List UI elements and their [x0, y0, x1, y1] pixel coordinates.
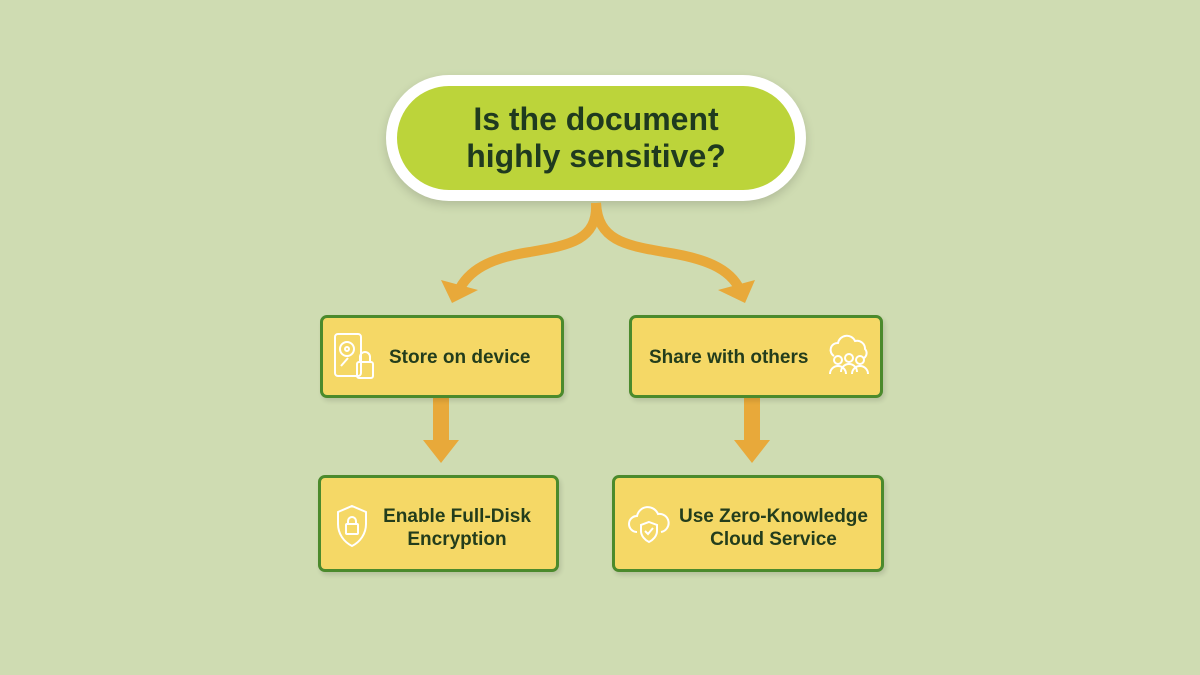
icon: drive lock [334, 333, 374, 379]
question pill: highly sensitive? [466, 138, 726, 174]
box: zero-knowledge cloud [612, 475, 884, 572]
box: store on device: Store on device [389, 347, 530, 368]
box: full-disk encryption: Encryption [407, 529, 507, 550]
icon: group cloud [829, 334, 869, 374]
box: zero-knowledge cloud: Cloud Service [710, 529, 837, 550]
icon: cloud shield [628, 506, 670, 543]
question pill [386, 75, 806, 201]
split arrow [458, 203, 740, 292]
box: share with others [629, 315, 883, 398]
box: zero-knowledge cloud: Use Zero-Knowledge [679, 506, 868, 527]
box: full-disk encryption: Enable Full-Disk [383, 506, 531, 527]
down arrow right [744, 398, 760, 442]
question pill: Is the document [473, 101, 719, 137]
box: store on device [320, 315, 564, 398]
box: full-disk encryption [318, 475, 559, 572]
box: share with others: Share with others [649, 347, 808, 368]
down arrow left [433, 398, 449, 442]
icon: shield lock [337, 504, 367, 547]
